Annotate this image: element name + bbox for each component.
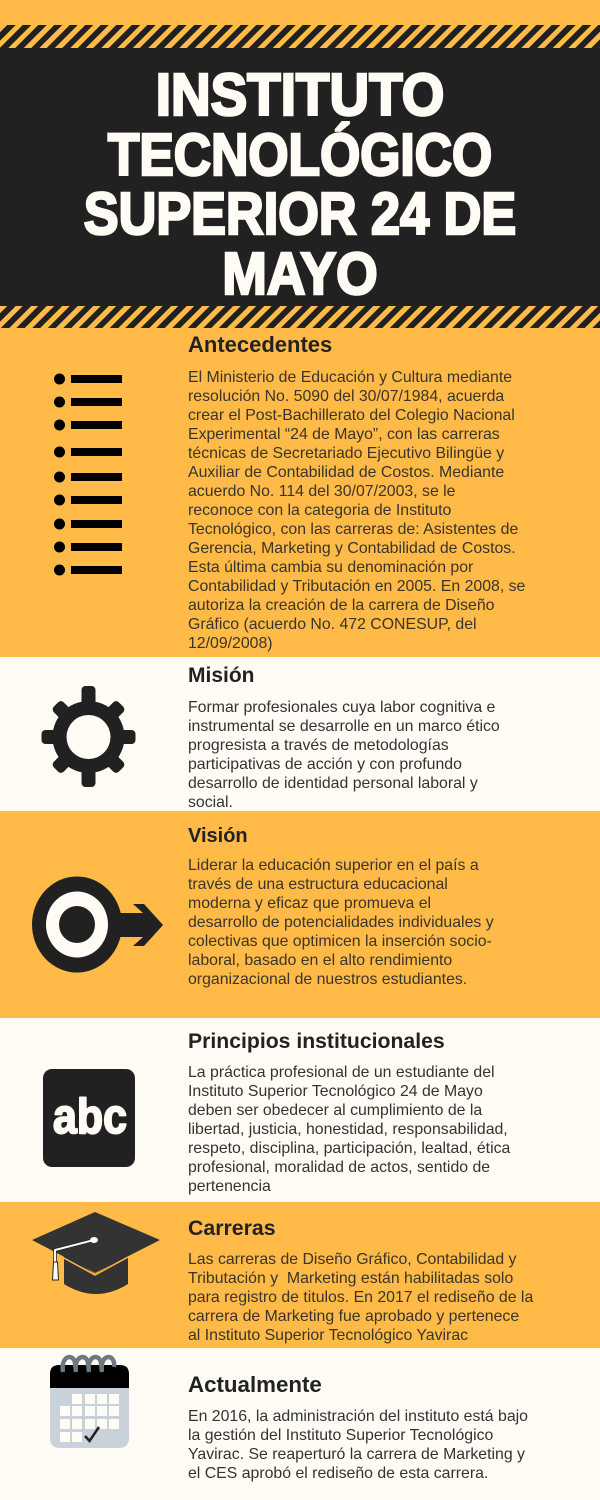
text: antecedentes: 12/09/2008) [188, 635, 273, 652]
text: antecedentes: resolución No. 5090 del 30/07/1984, acuerda [188, 388, 504, 405]
heading: actualmente: Actualmente [188, 1372, 322, 1397]
bottom hazard stripes [0, 306, 600, 328]
text: vision: través de una estructura educacional [188, 876, 448, 893]
text: principios [188, 1064, 510, 1195]
text: antecedentes: El Ministerio de Educación y Cultura mediante [188, 369, 512, 386]
text: vision: organizacional de nuestros estudiantes. [188, 971, 467, 988]
text: principios: pertenencia [188, 1178, 271, 1195]
text: vision: moderna y eficaz que promueva el [188, 895, 431, 912]
title [84, 62, 516, 306]
text: vision [188, 857, 494, 988]
text: actualmente: Yavirac. Se reaperturó la carrera de Marketing y [188, 1446, 525, 1463]
icon: list [54, 374, 122, 576]
text: principios: respeto, disciplina, participación, lealtad, ética [188, 1140, 510, 1157]
text: mision: Formar profesionales cuya labor cognitiva e [188, 699, 495, 716]
text: antecedentes: Auxiliar de Contabilidad de Costos. Mediante [188, 464, 504, 481]
text: principios: profesional, moralidad de actos, sentido de [188, 1159, 490, 1176]
text: actualmente: el CES aprobó el rediseño de esta carrera. [188, 1465, 488, 1482]
text: antecedentes: autoriza la creación de la carrera de Diseño [188, 597, 494, 614]
text: carreras: al Instituto Superior Tecnológico Yavirac [188, 1327, 468, 1344]
title: MAYO [222, 240, 378, 306]
text: vision: laboral, basado en el alto rendimiento [188, 952, 452, 969]
text: antecedentes: Gráfico (acuerdo No. 472 CONESUP, del [188, 616, 477, 633]
icon: abc tile [43, 1069, 135, 1167]
panel: vision [0, 811, 600, 1018]
text: antecedentes: Gerencia, Marketing y Contabilidad de Costos. [188, 540, 516, 557]
text: mision [188, 699, 500, 811]
text: carreras: Tributación y Marketing están habilitadas solo [188, 1270, 513, 1287]
text: principios: deben ser obedecer al cumplimiento de la [188, 1102, 482, 1119]
text: mision: participativas de acción y con profundo [188, 756, 462, 773]
text: principios: libertad, justicia, honestidad, responsabilidad, [188, 1121, 508, 1138]
text: carreras: Las carreras de Diseño Gráfico, Contabilidad y [188, 1251, 516, 1268]
text: antecedentes [188, 369, 525, 652]
icon: graduation cap [32, 1212, 160, 1294]
top yellow strip [0, 0, 600, 26]
text: antecedentes: técnicas de Secretariado Ejecutivo Bilingüe y [188, 445, 504, 462]
text: mision: progresista a través de metodologías [188, 737, 449, 754]
icon: target arrow [32, 876, 163, 972]
panel: antecedentes [0, 328, 600, 657]
title: SUPERIOR 24 DE [84, 181, 516, 247]
heading: vision: Visión [188, 825, 248, 847]
text: actualmente: En 2016, la administración del instituto está bajo [188, 1408, 528, 1425]
text: principios: Instituto Superior Tecnológico 24 de Mayo [188, 1083, 483, 1100]
text: antecedentes: Tecnológico, con las carreras de: Asistentes de [188, 521, 518, 538]
heading: mision: Misión [188, 664, 254, 687]
text: carreras: carrera de Marketing fue aprobado y pertenece [188, 1308, 519, 1325]
title: INSTITUTO [156, 62, 444, 128]
title: TECNOLÓGICO [108, 122, 492, 188]
icon: abc tile: abc [53, 1090, 127, 1144]
text: vision: Liderar la educación superior en el país a [188, 857, 479, 874]
heading: antecedentes: Antecedentes [188, 332, 332, 357]
icon: calendar [50, 1357, 129, 1448]
text: antecedentes: acuerdo No. 114 del 30/07/2003, se le [188, 483, 456, 500]
text: carreras [188, 1251, 534, 1344]
text: actualmente [188, 1408, 528, 1482]
title banner [0, 48, 600, 307]
heading: principios: Principios institucionales [188, 1030, 445, 1053]
text: mision: desarrollo de identidad personal laboral y [188, 775, 478, 792]
text: carreras: para registro de titulos. En 2017 el rediseño de la [188, 1289, 533, 1306]
text: antecedentes: reconoce con la categoria de Instituto [188, 502, 451, 519]
text: antecedentes: Contabilidad y Tributación en 2005. En 2008, se [188, 578, 525, 595]
text: antecedentes: Esta última cambia su denominación por [188, 559, 473, 576]
panel: mision [0, 657, 600, 811]
text: vision: desarrollo de potencialidades individuales y [188, 914, 494, 931]
text: vision: colectivas que optimicen la inserción socio- [188, 933, 492, 950]
panel: actualmente [0, 1348, 600, 1500]
text: mision: instrumental se desarrolle en un marco ético [188, 718, 500, 735]
panel: carreras [0, 1202, 600, 1348]
icon: gear [42, 686, 136, 787]
text: antecedentes: crear el Post-Bachillerato del Colegio Nacional [188, 407, 515, 424]
text: mision: social. [188, 794, 233, 811]
text: antecedentes: Experimental “24 de Mayo”, con las carreras [188, 426, 500, 443]
text: actualmente: la gestión del Instituto Superior Tecnológico [188, 1427, 493, 1444]
top hazard stripes [0, 25, 600, 48]
heading: carreras: Carreras [188, 1216, 276, 1240]
panel: principios [0, 1018, 600, 1202]
text: principios: La práctica profesional de un estudiante del [188, 1064, 495, 1081]
